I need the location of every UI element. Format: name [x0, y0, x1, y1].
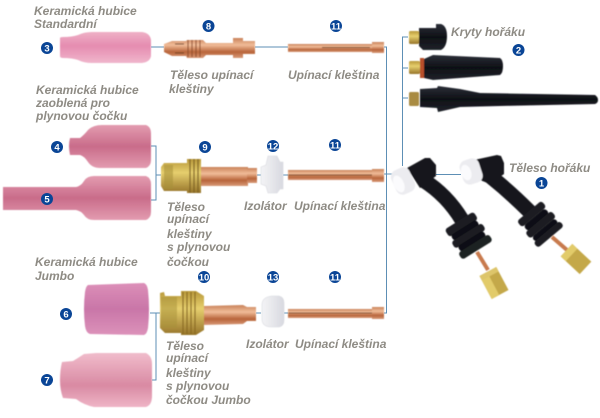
torch cap short	[409, 24, 447, 50]
label: Keramická hubice Jumbo: Jumbo	[35, 269, 74, 283]
number badges	[41, 20, 548, 386]
label: Těleso upínací kleštiny s plynovou čočkou Jumbo: čočkou Jumbo	[166, 393, 251, 407]
label: Těleso upínací kleštiny s plynovou čočkou: čočkou	[167, 255, 210, 269]
label: Izolátor middle: Izolátor	[244, 199, 288, 213]
gas lens body 9	[161, 159, 257, 193]
label: Těleso upínací kleštiny s plynovou čočkou Jumbo: kleštiny	[166, 366, 212, 380]
label: Keramická hubice zaoblená: Keramická hubice	[36, 83, 139, 97]
label: Keramická hubice zaoblená: zaoblená pro	[35, 96, 110, 110]
collet 11 middle	[288, 169, 384, 182]
jumbo gas lens body 10	[160, 291, 256, 335]
label: Těleso upínací kleštiny s plynovou čočkou: kleštiny	[167, 227, 213, 241]
torch body right	[458, 155, 591, 274]
label: Těleso upínací kleštiny s plynovou čočkou Jumbo: Těleso	[166, 339, 204, 353]
number badges: 11	[330, 272, 341, 284]
nozzle 5: long gas lens nozzle	[3, 176, 151, 220]
label: Izolátor bottom: Izolátor	[246, 337, 290, 351]
label: Keramická hubice Jumbo: Keramická hubice	[35, 255, 138, 269]
label: Těleso upínací kleštiny s plynovou čočkou Jumbo: s plynovou	[166, 379, 230, 393]
label: Těleso upínací kleštiny s plynovou čočkou: Těleso	[167, 200, 205, 214]
label: Těleso upínací kleštiny: kleštiny	[169, 82, 215, 96]
nozzle 3: standard ceramic nozzle	[60, 32, 151, 63]
isolator 13	[262, 296, 284, 327]
label: Těleso upínací kleštiny s plynovou čočkou: upínací	[167, 212, 211, 226]
label: Upínací kleština middle: Upínací kleština	[294, 199, 386, 213]
number badges: 5	[44, 194, 50, 206]
number badges: 3	[44, 44, 50, 54]
isolator 12	[261, 156, 283, 193]
label: Keramická hubice zaoblená: plynovou čočku	[35, 109, 128, 123]
label: Upínací kleština top: Upínací kleština	[288, 68, 380, 82]
collet 11 top	[288, 42, 384, 53]
label: Těleso hořáku: Těleso hořáku	[509, 161, 591, 175]
torch body left	[389, 158, 508, 299]
number badges: 6	[63, 310, 69, 320]
number badges: 1	[539, 178, 545, 190]
number badges: 9	[202, 142, 208, 154]
torch cap medium	[409, 55, 503, 80]
label: Kryty hořáku: Kryty hořáku	[451, 25, 526, 39]
connector lines	[150, 37, 461, 380]
number badges: 2	[516, 46, 521, 56]
number badges: 7	[44, 376, 50, 386]
number badges: 13	[268, 272, 278, 284]
label: Těleso upínací kleštiny s plynovou čočkou Jumbo: upínací	[166, 351, 210, 365]
torch cap long	[409, 86, 598, 112]
number badges: 10	[199, 272, 209, 284]
label: Těleso upínací kleštiny: Těleso upínací	[170, 68, 255, 82]
nozzle 7: jumbo nozzle with neck	[60, 353, 152, 407]
nozzle 4: rounded gas lens nozzle	[69, 125, 151, 168]
nozzle 6: jumbo nozzle	[84, 283, 149, 335]
number badges: 11	[331, 22, 342, 32]
label: Keramická hubice Standardní: Keramická hubice	[34, 4, 137, 18]
label: Upínací kleština bottom: Upínací kleština	[295, 337, 387, 351]
label: Těleso upínací kleštiny s plynovou čočkou: s plynovou	[167, 240, 231, 254]
collet 11 bottom	[288, 307, 384, 319]
number badges: 4	[54, 142, 60, 154]
label: Keramická hubice Standardní: Standardní	[34, 17, 98, 31]
number badges: 8	[206, 22, 211, 32]
number badges: 11	[330, 140, 341, 152]
number badges: 12	[268, 142, 278, 152]
collet body 8	[164, 38, 255, 58]
